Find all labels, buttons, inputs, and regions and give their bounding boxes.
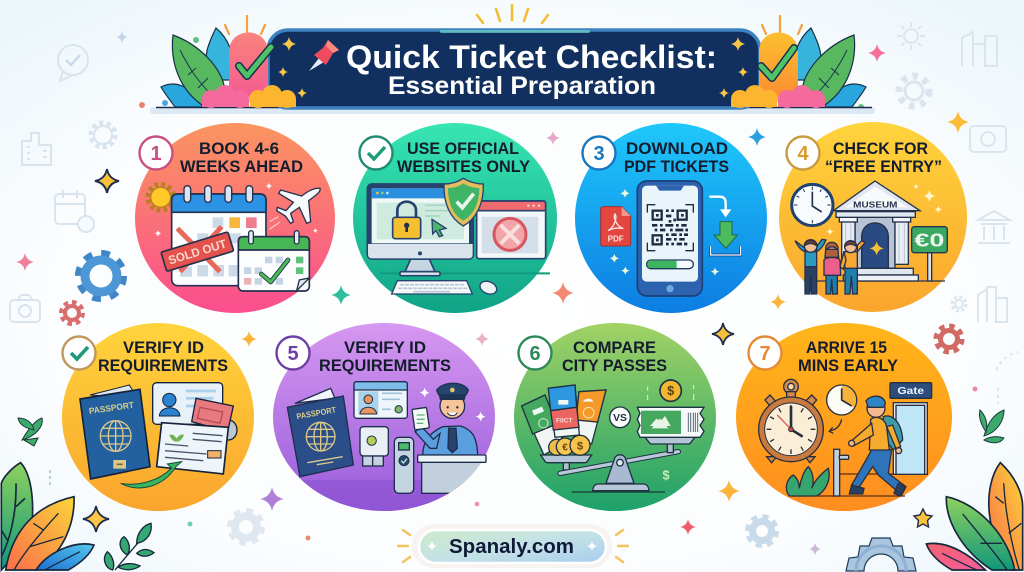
base line	[150, 107, 875, 114]
icon: right check mark	[761, 48, 794, 78]
left decoration	[161, 16, 296, 108]
heading 4: “FREE ENTRY”	[825, 158, 942, 176]
badge 5 check	[62, 336, 96, 370]
rays top centre	[477, 5, 548, 23]
illustration: museum, clock, family and euro sign: €0	[914, 229, 944, 250]
dashed line left	[49, 470, 51, 486]
heading 8	[798, 339, 898, 375]
panel 3: download tickets	[575, 123, 767, 313]
panel 2: official websites	[353, 123, 557, 313]
badge 8	[748, 336, 782, 370]
side sprig right	[979, 410, 1004, 443]
circle 8	[736, 323, 952, 511]
badge 1: 1	[150, 143, 162, 165]
illustration: scale with tickets and coins	[522, 380, 704, 492]
panel 7: compare passes	[514, 323, 716, 511]
badge 2	[360, 136, 392, 170]
heading 3	[624, 140, 729, 176]
illustration: passport, ID, scanner, officer: PASSPORT	[296, 405, 337, 421]
illustration: scale with tickets and coins: $	[662, 468, 670, 482]
gear: large bottom right	[846, 538, 916, 571]
footer pill: Spanaly.com	[398, 524, 628, 568]
illustration: passport and ID cards	[80, 383, 237, 488]
background icons: right	[897, 22, 1018, 404]
gear: blue	[80, 255, 122, 297]
badge 6	[276, 336, 310, 370]
badge 3	[582, 136, 616, 170]
panel 5: verify ID with check	[62, 323, 254, 511]
title text: Essential Preparation	[388, 72, 656, 100]
leaves: bottom left	[1, 463, 94, 570]
badge 4	[786, 136, 820, 170]
badge 7	[518, 336, 552, 370]
illustration: phone with QR code	[601, 181, 741, 296]
heading 4	[825, 140, 942, 176]
background icons: left	[10, 45, 115, 322]
illustration: passport and ID cards: PASSPORT	[88, 400, 135, 416]
icon: pushpin	[309, 40, 339, 71]
heading 5: REQUIREMENTS	[98, 357, 228, 375]
heading 6: REQUIREMENTS	[319, 357, 451, 375]
heading 5: VERIFY ID	[123, 339, 204, 357]
gear: pale lower left	[231, 512, 261, 542]
badge 1	[140, 136, 172, 170]
circle 1	[135, 123, 335, 313]
side sprig left	[18, 418, 42, 446]
illustration: calendars and plane: SOLD OUT	[167, 236, 229, 267]
illustration: scale with tickets and coins: VS	[613, 413, 627, 424]
illustration: calendars and plane	[148, 183, 320, 291]
heading 1: BOOK 4-6	[199, 140, 279, 158]
circle 4	[779, 122, 967, 312]
floor band	[302, 480, 466, 511]
badge 3: 3	[593, 143, 605, 165]
illustration: scale with tickets and coins: $	[667, 384, 674, 398]
illustration: museum, clock, family and euro sign: MUSEUM	[853, 199, 898, 209]
illustration: scale with tickets and coins: $	[577, 440, 584, 452]
badge 8: 7	[759, 343, 771, 365]
panel 8: arrive early	[736, 323, 952, 511]
panel 4: free entry	[779, 122, 967, 312]
heading 7: COMPARE	[573, 339, 656, 357]
banner sparkles	[278, 37, 748, 98]
banner panel	[268, 30, 760, 108]
badge 4: 4	[797, 143, 809, 165]
illustration: stopwatch and traveller at gate	[759, 379, 932, 496]
star: bottom right	[914, 509, 932, 527]
heading 6	[319, 339, 451, 375]
heading 1	[180, 140, 303, 176]
badge 6: 5	[287, 343, 299, 365]
heading 4: CHECK FOR	[833, 140, 928, 158]
heading 5	[98, 339, 228, 375]
illustration: passport, ID, scanner, officer	[287, 382, 486, 493]
heading 7: CITY PASSES	[562, 357, 667, 375]
heading 2: USE OFFICIAL	[407, 140, 519, 158]
circle 7	[514, 323, 716, 511]
footer pill: Spanaly.com: Spanaly.com	[449, 536, 574, 558]
title banner group	[150, 5, 875, 114]
gear: red right	[937, 327, 961, 351]
panel 1: book ahead	[135, 123, 335, 313]
heading 2	[397, 140, 530, 176]
circle 6	[273, 323, 495, 511]
heading 3: DOWNLOAD	[626, 140, 728, 158]
leaves: bottom right	[926, 463, 1023, 570]
circle 5	[62, 323, 254, 511]
heading 7	[562, 339, 667, 375]
illustration: stopwatch and traveller at gate: Gate	[897, 386, 925, 397]
heading 8: MINS EARLY	[798, 357, 898, 375]
title text	[346, 39, 717, 100]
right decoration	[731, 16, 866, 108]
panel 6: verify ID at desk	[273, 323, 495, 520]
title text: Quick Ticket Checklist:	[346, 39, 717, 75]
heading 3: PDF TICKETS	[624, 158, 729, 176]
illustration: scale with tickets and coins: FIICT	[556, 418, 573, 425]
badge 7: 6	[529, 343, 541, 365]
illustration: phone with QR code: PDF	[608, 235, 624, 244]
heading 1: WEEKS AHEAD	[180, 158, 303, 176]
heading 8: ARRIVE 15	[806, 339, 887, 357]
circle 2	[353, 123, 557, 313]
sprig: bottom left	[104, 523, 154, 570]
illustration: monitor, shield, blocked window	[367, 178, 550, 296]
heading 2: WEBSITES ONLY	[397, 158, 530, 176]
gear: pale lower right	[749, 518, 775, 544]
illustration: museum, clock, family and euro sign	[792, 181, 947, 294]
heading 6: VERIFY ID	[344, 339, 426, 357]
gear: red left	[62, 303, 82, 323]
circle 3	[575, 123, 767, 313]
illustration: scale with tickets and coins: €	[562, 443, 568, 454]
